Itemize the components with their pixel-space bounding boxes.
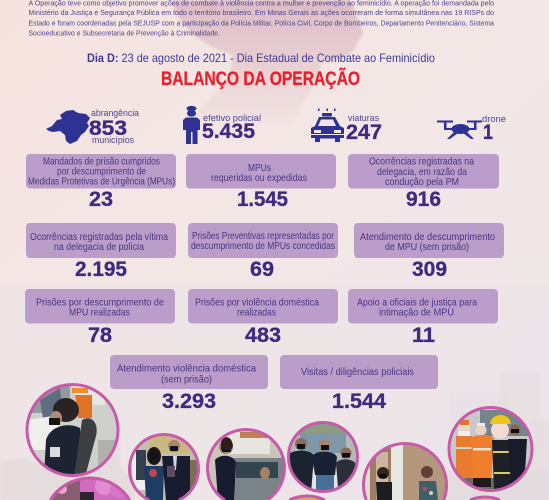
photo: home visit doorway [362,442,448,500]
stat: abrangencia: 853 [89,116,127,140]
intro paragraph: Estado e foram coordenadas pela SEJUSP com a participação da Polícia Militar, Polícia Civil, Corpo de Bombeiros, Departamento Penitenciário, Sistema [28,18,495,28]
card: MPUs: 1.545 [237,187,288,211]
card: atendimento descumprimento: de MPU (sem prisão) [385,242,469,253]
card: violencia domestica: 483 [245,323,281,347]
card: atendimento violencia: (sem prisão) [161,374,212,386]
photo: flowers [44,477,136,500]
card: mandados: 23 [89,187,113,211]
card: ocorrencias vitima [26,223,176,281]
card: oficiais de justica: 11 [412,323,435,347]
icon: police officer [183,106,200,144]
card: ocorrencias vitima: Ocorrências registradas pela vítima [30,232,168,243]
card: MPUs: requeridas ou expedidas [211,173,307,184]
title: BALANÇO DA OPERAÇÃO [161,67,360,90]
card: prisoes preventivas [188,223,338,281]
card: ocorrencias vitima: na delegacia de polícia [54,242,144,253]
summary stats [46,106,506,145]
card: ocorrencias PM [348,154,499,211]
card: mandados: por descumprimento de [57,167,146,178]
icon: police car [311,108,344,142]
stat: viaturas: 247 [346,120,382,144]
photo: bottom centre crop [285,495,329,500]
photo circles [26,383,533,500]
card: violencia domestica: realizadas [237,308,276,318]
stat: drone: 1 [483,120,493,144]
card: atendimento violencia: Atendimento violência doméstica [117,364,256,374]
stat: efetivo policial: efetivo policial [203,113,261,123]
card: atendimento descumprimento [354,223,504,281]
city skyline [0,372,549,500]
card: atendimento violencia: 3.293 [162,389,216,413]
intro paragraph [28,0,495,38]
stat: efetivo policial: 5.435 [202,119,255,143]
photo: officer at control room [26,383,120,477]
card: prisoes descumprimento: MPU realizadas [69,308,130,318]
photo: three police officers [287,421,359,494]
card: mandados [26,154,176,211]
photo: bottom right crop [470,496,500,500]
woman silhouette [172,0,363,128]
card: prisoes preventivas: descumprimento de MPUs concedidas [191,241,335,252]
card: visitas: Visitas / diligências policiais [301,367,414,378]
stat: abrangencia: abrangência [91,108,139,118]
card: atendimento descumprimento: 309 [412,257,447,281]
card: visitas [280,355,438,413]
icon: Minas Gerais map [46,110,90,144]
card: MPUs [186,154,336,211]
card: mandados: Medidas Protetivas de Urgência (MPUs) [28,177,175,188]
photo: firefighters with mascot [449,407,533,492]
icon: drone [437,120,482,139]
card: oficiais de justica [348,289,498,347]
indicator cards [25,154,504,413]
card: ocorrencias vitima: 2.195 [75,257,127,281]
card: prisoes preventivas: 69 [250,257,274,281]
intro paragraph: Ministério da Justiça e Segurança Pública em todo o território brasileiro. Em Minas Gerais as ações ocorreram de forma simultânea nas 19 RISPs do [28,8,494,17]
photo: two people with booklet [128,433,200,500]
card: ocorrencias PM: Ocorrências registradas na [369,156,474,168]
stat: viaturas: viaturas [348,113,380,123]
card: visitas: 1.544 [332,389,386,413]
date line: Dia D: 23 de agosto de 2021 - Dia Estadual de Combate ao Feminicídio [87,52,435,65]
stat: drone: drone [482,114,506,124]
stat: drone [482,114,506,144]
card: ocorrencias PM: 916 [406,187,441,211]
card: violencia domestica [188,289,338,347]
card: atendimento violencia [110,355,268,413]
card: prisoes descumprimento: Prisões por descumprimento de [36,298,164,308]
stat: abrangencia [89,108,139,145]
card: prisoes preventivas: Prisões Preventivas representadas por [192,231,334,242]
card: violencia domestica: Prisões por violência doméstica [195,298,319,308]
card: ocorrencias PM: condução pela PM [385,177,459,188]
stat: abrangencia: municípios [92,135,135,145]
card: prisoes descumprimento: 78 [88,323,112,347]
card: MPUs: MPUs [248,163,271,174]
intro paragraph: Socioeducativo e Subsecretaria de Prevenção à Criminalidade. [28,28,220,38]
card: prisoes descumprimento [25,289,175,347]
card: ocorrencias PM: delegacia, em razão da [377,167,467,178]
card: mandados: Mandados de prisão cumpridos [43,156,160,168]
card: atendimento descumprimento: Atendimento de descumprimento [360,232,495,243]
card: oficiais de justica: Apoio a oficiais de justiça para [357,298,477,308]
card: oficiais de justica: intimação de MPU [379,308,454,318]
photo: officer at car window [206,428,286,500]
